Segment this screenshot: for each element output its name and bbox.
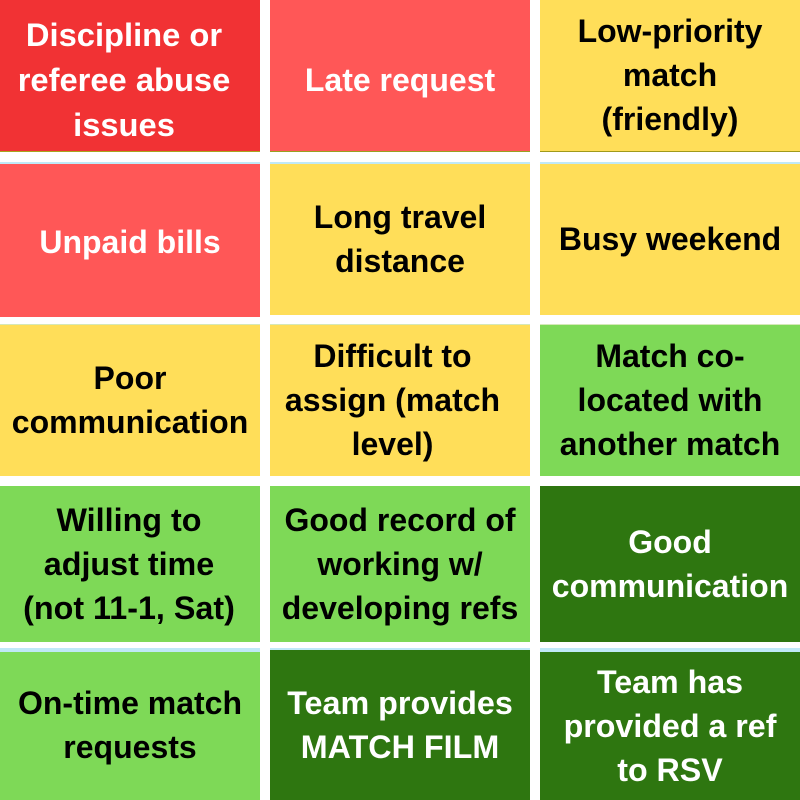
cell: Good communication: Good xyxy=(628,524,712,560)
cell: Match co-located with another match: another match xyxy=(560,426,780,462)
cell: Good record of working w/ developing refs: working w/ xyxy=(317,546,483,582)
cell: Match co-located with another match: Match co- xyxy=(595,338,745,374)
cell: Unpaid bills xyxy=(0,164,260,317)
cell: Difficult to assign (match level): Difficult to xyxy=(313,338,472,374)
cell: Willing to adjust time (not 11-1, Sat): Willing to xyxy=(56,502,202,538)
cell: Team has provided a ref to RSV: provided a ref xyxy=(564,708,776,744)
cell: Late request xyxy=(270,0,530,152)
cell: Late request: Late request xyxy=(305,62,495,98)
cell: Team has provided a ref to RSV: Team has xyxy=(597,664,743,700)
cell: Difficult to assign (match level) xyxy=(270,325,530,476)
cell: On-time match requests: requests xyxy=(63,729,197,765)
cell: Willing to adjust time (not 11-1, Sat): adjust time xyxy=(44,546,214,582)
cell: Team has provided a ref to RSV: to RSV xyxy=(617,752,723,788)
cell: Good communication xyxy=(540,486,800,642)
cell: Low-priority match (friendly): (friendly) xyxy=(602,101,738,137)
cell: Willing to adjust time (not 11-1, Sat) xyxy=(0,486,260,642)
cell: Busy weekend: Busy weekend xyxy=(559,221,781,257)
cell: Match co-located with another match xyxy=(540,325,800,476)
cell: Discipline or referee abuse issues: Discipline or xyxy=(26,16,222,53)
cell: Difficult to assign (match level): level) xyxy=(352,426,433,462)
cell: Team provides MATCH FILM: Team provides xyxy=(287,685,513,721)
cell: On-time match requests xyxy=(0,652,260,800)
cell: Discipline or referee abuse issues xyxy=(0,0,260,152)
cell: Good communication: communication xyxy=(552,568,788,604)
cell: Low-priority match (friendly) xyxy=(540,0,800,152)
cell: Unpaid bills: Unpaid bills xyxy=(39,224,221,260)
cell: Poor communication xyxy=(0,325,260,476)
cell: Poor communication: Poor xyxy=(94,360,166,396)
cell: Team provides MATCH FILM xyxy=(270,650,530,800)
cell: Team provides MATCH FILM: MATCH FILM xyxy=(301,729,499,765)
cell: Good record of working w/ developing refs xyxy=(270,486,530,642)
cell: Long travel distance: distance xyxy=(335,243,465,279)
cell: Difficult to assign (match level): assign (match xyxy=(285,382,500,418)
cell: Long travel distance xyxy=(270,164,530,315)
cell: Discipline or referee abuse issues: referee abuse xyxy=(18,61,230,98)
cell: Willing to adjust time (not 11-1, Sat): (not 11-1, Sat) xyxy=(23,590,235,626)
cell: Good record of working w/ developing refs: Good record of xyxy=(284,502,516,538)
cell: Match co-located with another match: located with xyxy=(578,382,762,418)
cell: Good record of working w/ developing refs: developing refs xyxy=(282,590,518,626)
cell: Low-priority match (friendly): Low-priority xyxy=(578,13,762,49)
cell: On-time match requests: On-time match xyxy=(18,685,242,721)
cell: Low-priority match (friendly): match xyxy=(623,57,717,93)
cell: Discipline or referee abuse issues: issues xyxy=(73,106,175,143)
cell: Long travel distance: Long travel xyxy=(314,199,486,235)
cell: Team has provided a ref to RSV xyxy=(540,652,800,800)
cell: Poor communication: communication xyxy=(12,404,248,440)
cell: Busy weekend xyxy=(540,164,800,315)
